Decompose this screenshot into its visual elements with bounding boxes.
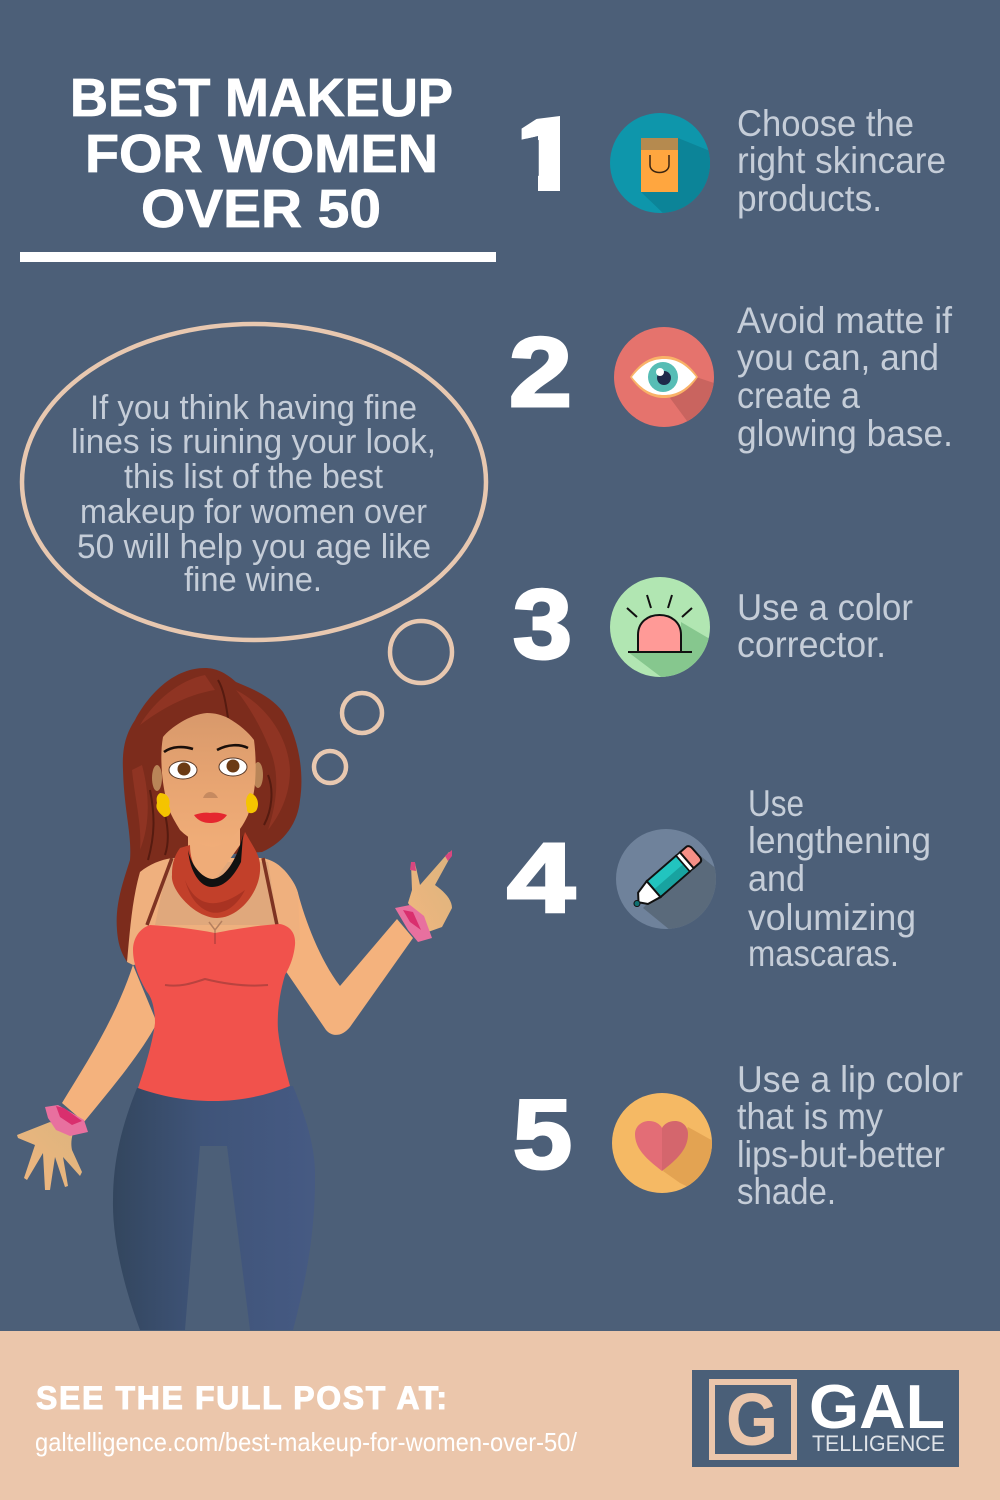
jeans xyxy=(113,1086,315,1330)
step 3 xyxy=(514,577,912,677)
straps xyxy=(147,858,277,925)
nails xyxy=(410,850,452,871)
logo: GAL xyxy=(809,1373,945,1442)
eyebrows xyxy=(164,745,248,752)
step text 3: Use a color xyxy=(737,587,913,628)
number 4: 4 xyxy=(507,823,575,933)
face xyxy=(161,713,256,847)
title xyxy=(70,68,453,239)
chest and shoulders xyxy=(127,858,300,965)
step text 4: volumizing xyxy=(748,897,916,938)
step 1 xyxy=(522,109,944,218)
step text 2: Avoid matte if xyxy=(737,300,953,341)
left scrunchie xyxy=(45,1105,88,1136)
right arm xyxy=(280,868,413,1035)
title: FOR WOMEN xyxy=(85,124,438,184)
bubble text: this list of the best xyxy=(124,458,384,496)
step 2 xyxy=(509,300,953,454)
scarf xyxy=(172,832,260,918)
bubble text: makeup for women over xyxy=(80,493,427,531)
hair back xyxy=(117,668,301,963)
step text 5: shade. xyxy=(737,1171,836,1212)
step text 4 xyxy=(748,783,931,974)
step text 5 xyxy=(737,1059,963,1212)
logo: G xyxy=(726,1378,778,1461)
step text 2: create a xyxy=(737,375,860,416)
step 5 xyxy=(513,1059,963,1212)
bubble text: If you think having fine xyxy=(90,389,417,427)
step 4 xyxy=(507,783,931,974)
step text 4: Use xyxy=(748,783,804,824)
icon: siren xyxy=(610,577,710,677)
left arm xyxy=(62,965,157,1122)
eyes xyxy=(169,761,197,779)
number 2: 2 xyxy=(509,317,572,427)
step text 1: right skincare xyxy=(737,140,946,181)
step text 4: lengthening xyxy=(748,820,931,861)
neck xyxy=(188,828,240,884)
step text 5: lips-but-better xyxy=(737,1134,945,1175)
right hand xyxy=(408,852,452,932)
step text 1: Choose the xyxy=(737,103,914,144)
step text 2: you can, and xyxy=(737,337,939,378)
footer heading: SEE THE FULL POST AT: xyxy=(36,1380,447,1416)
step text 1: products. xyxy=(737,178,882,219)
icon: pencil xyxy=(616,829,716,929)
logo xyxy=(692,1370,959,1467)
footer band xyxy=(0,1331,1000,1500)
footer url: galtelligence.com/best-makeup-for-women-over-50/ xyxy=(35,1427,578,1457)
bubble text: fine wine. xyxy=(184,561,322,599)
necklace xyxy=(209,921,222,944)
woman illustration xyxy=(17,668,452,1330)
lips xyxy=(194,813,227,823)
top xyxy=(133,924,295,1101)
step text 1 xyxy=(737,103,946,219)
number 1: 1 xyxy=(519,98,577,214)
number 3: 3 xyxy=(513,569,572,679)
icon: shopping bag xyxy=(610,113,710,213)
right scrunchie xyxy=(395,905,432,942)
step text 2 xyxy=(737,300,953,454)
step text 3: corrector. xyxy=(737,624,886,665)
step text 2: glowing base. xyxy=(737,413,953,454)
title underline xyxy=(20,252,496,262)
step text 5: Use a lip color xyxy=(737,1059,963,1100)
title: OVER 50 xyxy=(141,179,381,239)
logo: TELLIGENCE xyxy=(812,1431,945,1456)
icon: heart xyxy=(612,1093,715,1200)
step text 5: that is my xyxy=(737,1096,883,1137)
earrings xyxy=(156,793,258,817)
title: BEST MAKEUP xyxy=(70,68,453,128)
step text 4: and xyxy=(748,858,805,899)
step text 4: mascaras. xyxy=(748,933,899,974)
bubble text: lines is ruining your look, xyxy=(71,423,436,461)
icon: eye xyxy=(614,327,714,427)
hair strands xyxy=(132,675,290,850)
thought bubble xyxy=(22,324,486,783)
step text 3 xyxy=(737,587,913,665)
ears xyxy=(152,765,162,791)
bubble text: 50 will help you age like xyxy=(77,528,431,566)
left hand xyxy=(17,1122,82,1190)
bubble text xyxy=(71,389,436,599)
number 5: 5 xyxy=(513,1079,572,1189)
nose xyxy=(203,792,218,798)
